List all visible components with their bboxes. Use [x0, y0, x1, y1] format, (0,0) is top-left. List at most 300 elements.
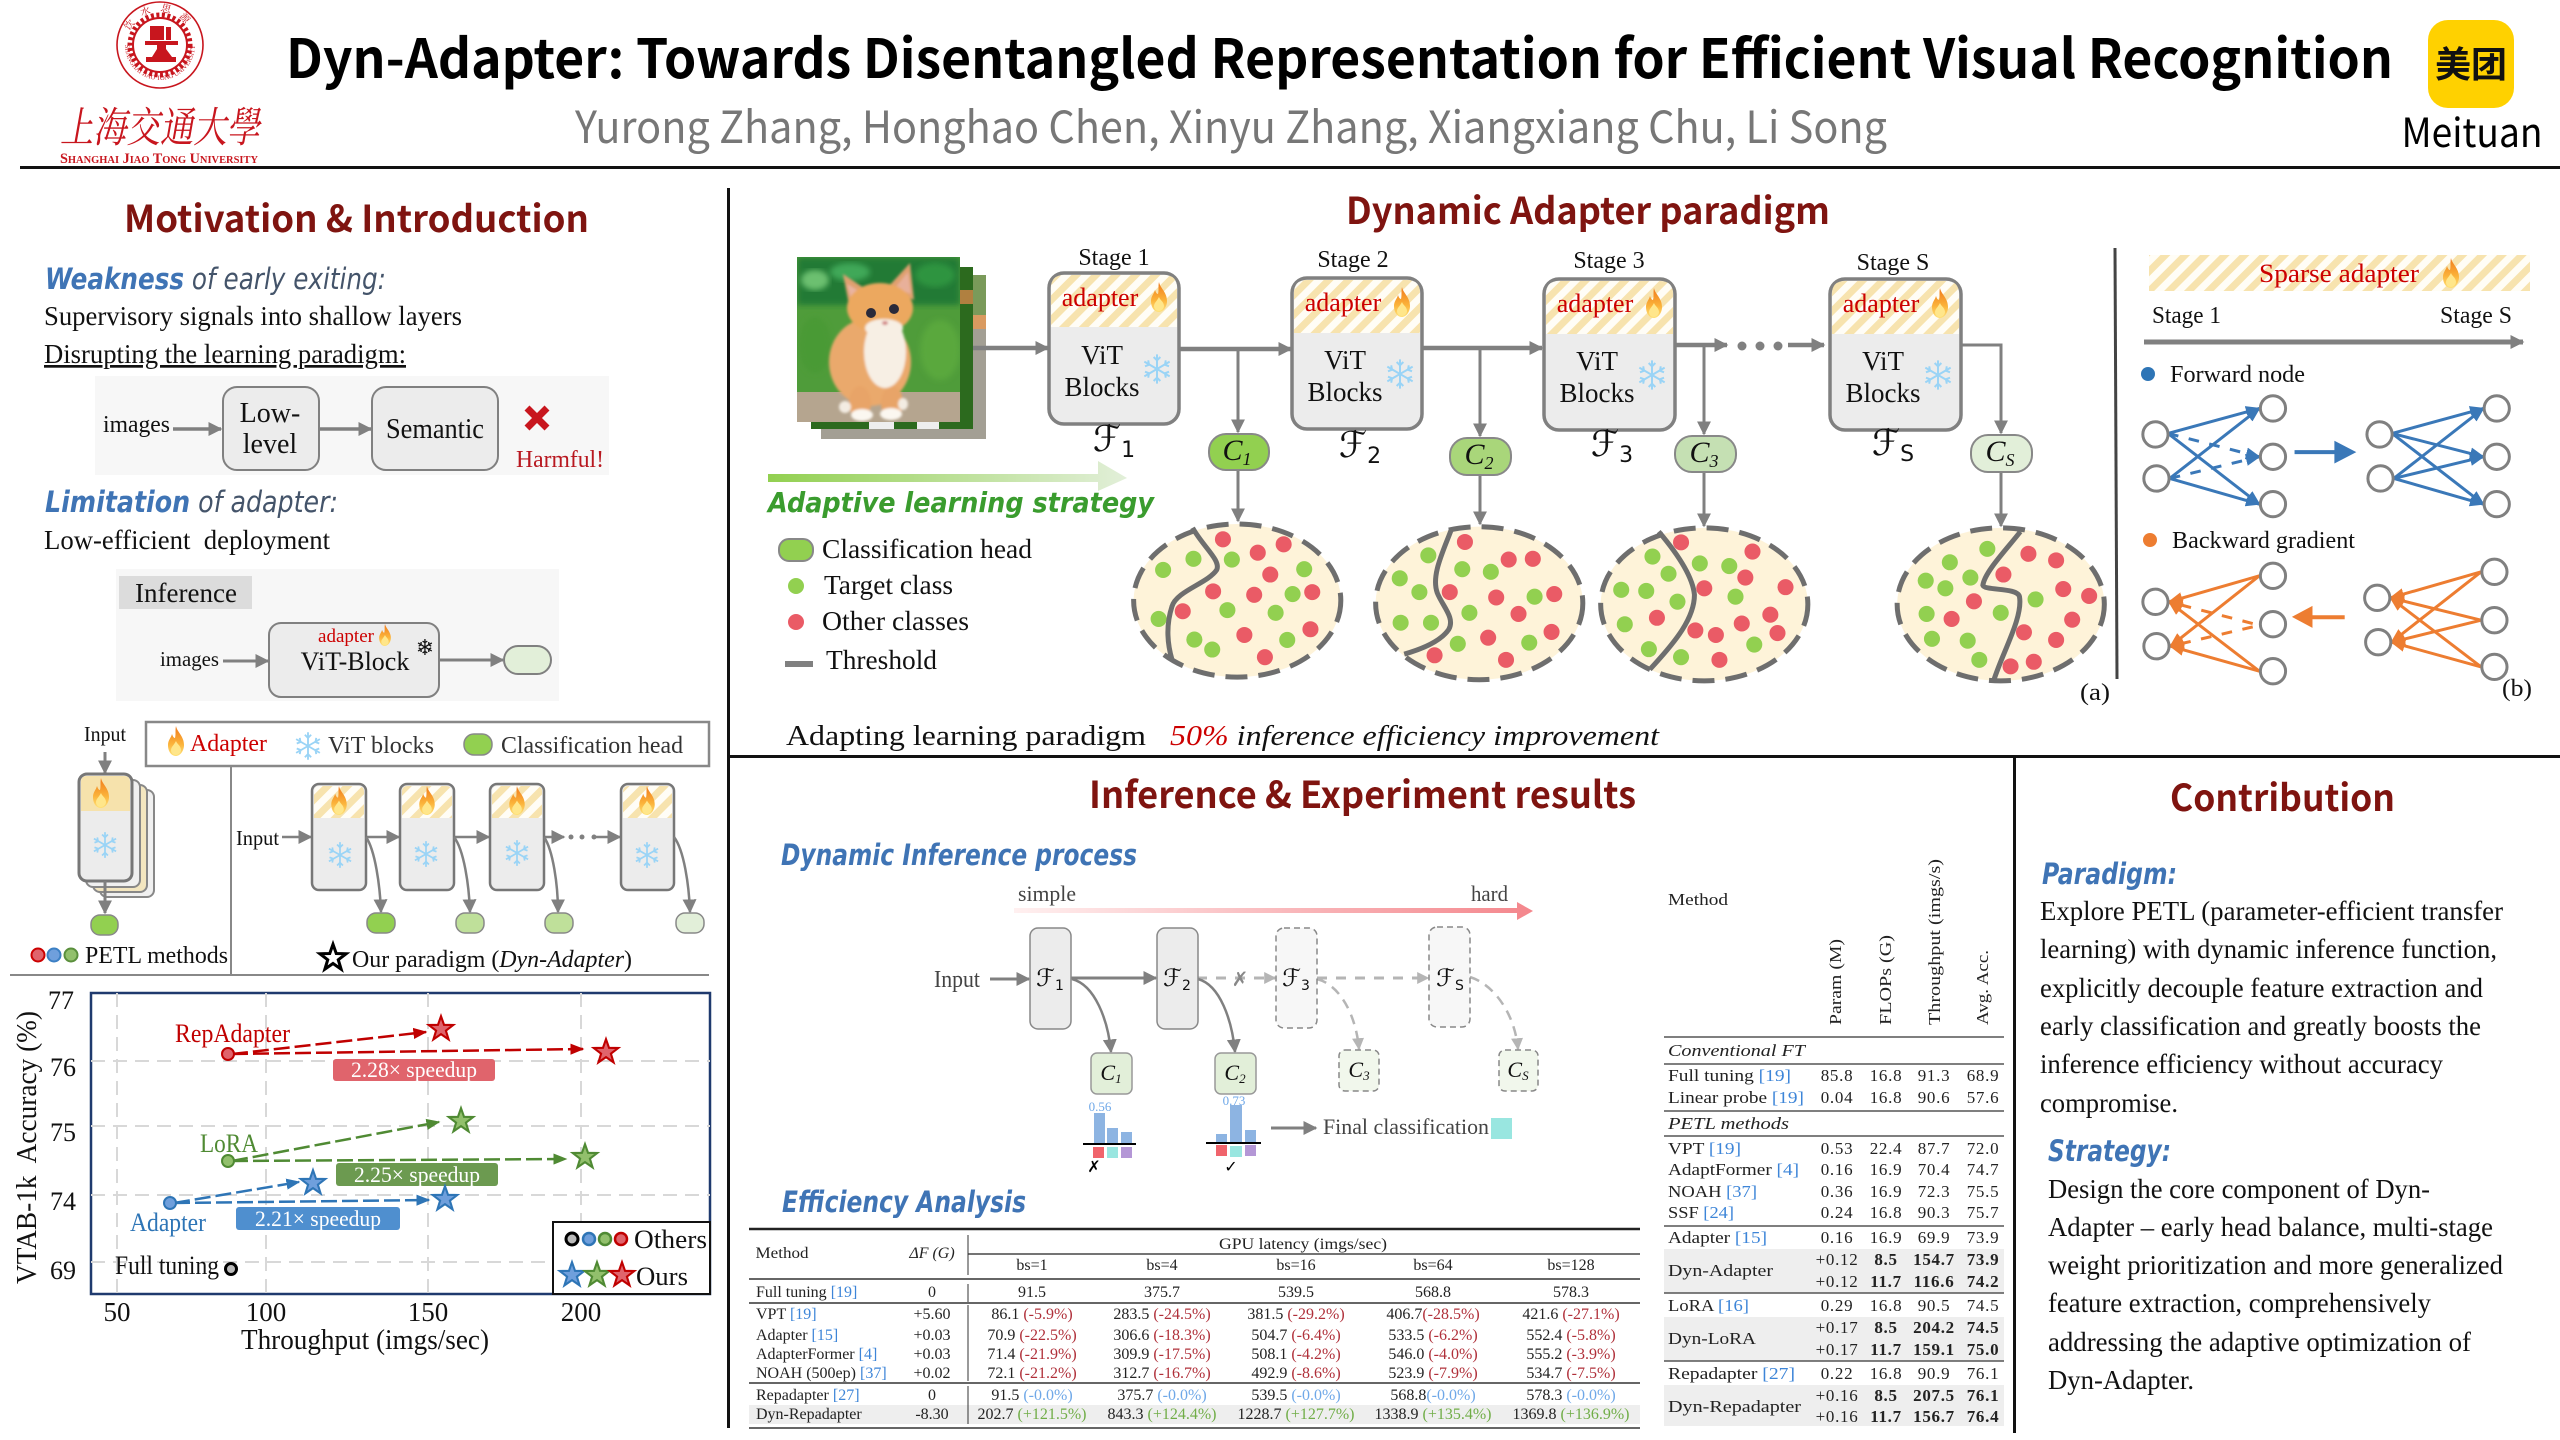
title: Dyn-Adapter: Towards Disentangled Representation for Efficient Visual Recognition: [286, 15, 2393, 94]
y axis title: VTAB-1k Accuracy (%): [12, 1011, 43, 1284]
table: method comparison: VPT [19]: [1668, 1139, 1741, 1158]
table: method comparison: 90.6: [1918, 1088, 1950, 1107]
table: GPU latency: +0.03: [913, 1327, 951, 1344]
table: GPU latency: bs=64: [1413, 1257, 1453, 1274]
series: Adapter: [130, 1170, 457, 1237]
table: method comparison: NOAH [37]: [1668, 1182, 1757, 1201]
nodes: [2143, 396, 2509, 684]
diagram: harmful early exit: [95, 376, 609, 475]
table: GPU latency: 283.5 (-24.5%): [1113, 1306, 1211, 1323]
table: method comparison: +0.17: [1816, 1340, 1858, 1359]
table: method comparison: 90.9: [1918, 1364, 1950, 1383]
table: method comparison: 0.29: [1821, 1296, 1853, 1315]
table: method comparison: 8.5: [1874, 1386, 1898, 1405]
table: method comparison: 16.9: [1870, 1182, 1902, 1201]
text: weakness of early exiting: Weakness of early exiting:: [45, 262, 386, 296]
table: method comparison: 16.9: [1870, 1228, 1902, 1247]
diagram: dynamic inference: ℱ: [1036, 964, 1055, 992]
diagram: harmful early exit: Semantic: [386, 414, 484, 445]
text: adapting learning paradigm: Adapting learning paradigm: [786, 720, 1146, 752]
table: method comparison: Adapter [15]: [1668, 1228, 1767, 1247]
table: GPU latency: +5.60: [913, 1306, 951, 1323]
series: RepAdapter: [175, 1016, 618, 1082]
legend: adaptive strategy: Threshold: [826, 645, 937, 675]
classification heads: 2: [1485, 453, 1494, 473]
diagram: dynamic inference: S: [1522, 1068, 1529, 1083]
table: method comparison: 74.5: [1967, 1296, 1999, 1315]
diagram: harmful early exit: images: [103, 412, 170, 438]
table: GPU latency: +0.03: [913, 1346, 951, 1363]
table: GPU latency: 86.1 (-5.9%): [991, 1306, 1073, 1323]
arrow: forward transition: [2295, 441, 2356, 463]
x axis labels: 100: [246, 1297, 286, 1327]
table: method comparison: 90.3: [1918, 1203, 1950, 1222]
text: paradigm body: early classification and greatly boosts the: [2040, 1011, 2481, 1041]
image: kitten: [797, 257, 986, 439]
table: method comparison: FLOPs (G): [1876, 935, 1895, 1025]
diagram: dynamic inference: hard: [1471, 881, 1508, 906]
logo: Meituan: [2402, 20, 2542, 159]
block: stage 3: ViT: [1576, 346, 1618, 376]
diagram: harmful early exit: Harmful!: [516, 447, 604, 473]
table: method comparison: 57.6: [1967, 1088, 1999, 1107]
legend: adaptive strategy: [779, 534, 1032, 675]
legend: [146, 722, 709, 766]
table: method comparison: 73.9: [1967, 1250, 1999, 1269]
series: RepAdapter: 2.28× speedup: [351, 1057, 477, 1082]
table: GPU latency: 534.7 (-7.5%): [1526, 1365, 1616, 1382]
table: method comparison: 154.7: [1913, 1250, 1955, 1269]
logo: Shanghai Jiao Tong University: [58, 1, 268, 167]
table: GPU latency: 568.8(-0.0%): [1390, 1387, 1476, 1404]
diagram: PETL methods stack: [32, 722, 228, 969]
x axis labels: 50: [104, 1297, 130, 1327]
table: method comparison: Dyn-Adapter: [1668, 1261, 1773, 1280]
table: GPU latency: 375.7: [1144, 1284, 1180, 1301]
text: low-efficient deployment: Low-efficient deployment: [44, 525, 330, 555]
x axis labels: [104, 1297, 601, 1327]
block: stage 3: Blocks: [1559, 378, 1635, 408]
block: stage 3: ℱ: [1591, 424, 1619, 465]
subheading: paradigm: Paradigm:: [2042, 857, 2177, 891]
legend: Classification head: [501, 733, 683, 759]
label: a: (a): [2080, 680, 2110, 706]
diagram: dynamic inference: simple: [1018, 881, 1076, 906]
stage axis: Stage S: [2440, 303, 2512, 329]
panel: inference and experiment results: [749, 765, 2004, 1428]
table: GPU latency: 1369.8 (+136.9%): [1512, 1406, 1630, 1423]
table: GPU latency: bs=4: [1146, 1257, 1178, 1274]
block: stage 3: Stage 3: [1573, 248, 1645, 274]
panel: contribution: [2040, 768, 2503, 1395]
text: strategy body: Design the core component of Dyn-: [2048, 1174, 2430, 1204]
table: method comparison: 76.1: [1967, 1364, 1999, 1383]
block: stage 1: [1049, 245, 1179, 463]
classification heads: 1: [1243, 449, 1252, 469]
block: stage S: [1830, 250, 1961, 467]
table: GPU latency: 1338.9 (+135.4%): [1374, 1406, 1492, 1423]
table: GPU latency: GPU latency (imgs/sec): [1219, 1236, 1387, 1253]
chart legend: Others: [634, 1225, 707, 1254]
table: GPU latency: 309.9 (-17.5%): [1113, 1346, 1211, 1363]
text: strategy body: addressing the adaptive optimization of: [2048, 1327, 2471, 1357]
table: method comparison: 22.4: [1870, 1139, 1902, 1158]
table: method comparison: 0.22: [1821, 1364, 1853, 1383]
block: stage 2: 2: [1367, 444, 1381, 469]
table: GPU latency: 508.1 (-4.2%): [1251, 1346, 1341, 1363]
diagram: dynamic inference: ✗: [1232, 967, 1248, 991]
panel: motivation and introduction: [44, 189, 609, 701]
diagram: dynamic inference: S: [1455, 978, 1464, 994]
table: method comparison: 11.7: [1870, 1272, 1902, 1291]
classification heads: 3: [1709, 451, 1719, 471]
table: method comparison: 85.8: [1821, 1066, 1853, 1085]
table: method comparison: 16.8: [1870, 1364, 1902, 1383]
text: supervisory signals: Supervisory signals into shallow layers: [44, 301, 462, 331]
block: stage 2: ViT: [1324, 345, 1366, 375]
table: method comparison: 116.6: [1914, 1272, 1954, 1291]
x axis labels: 150: [408, 1297, 448, 1327]
table: GPU latency: ΔF (G): [908, 1245, 955, 1262]
text: paradigm body: explicitly decouple feature extraction and: [2040, 973, 2483, 1003]
legend: adaptive strategy: Other classes: [822, 606, 969, 636]
block: stage 3: adapter: [1557, 289, 1634, 318]
table: GPU latency: 578.3 (-0.0%): [1526, 1387, 1616, 1404]
diagram: dynamic inference: ℱ: [1282, 964, 1301, 992]
series: RepAdapter: RepAdapter: [175, 1019, 290, 1048]
table: method comparison: 11.7: [1870, 1407, 1902, 1426]
table: GPU latency: 843.3 (+124.4%): [1107, 1406, 1217, 1423]
diagram: dynamic inference: 3: [1362, 1068, 1370, 1083]
diagram: dynamic inference: 1: [1115, 1071, 1122, 1086]
text: strategy body: weight prioritization and more generalized: [2048, 1250, 2503, 1280]
table: method comparison: 72.3: [1918, 1182, 1950, 1201]
table: method comparison: 73.9: [1967, 1228, 1999, 1247]
text: adaptive learning strategy: Adaptive learning strategy: [766, 486, 1156, 519]
table: method comparison: 0.53: [1821, 1139, 1853, 1158]
table: method comparison: +0.12: [1816, 1272, 1858, 1291]
table: method comparison: 91.3: [1918, 1066, 1950, 1085]
plot: stage S: [1897, 528, 2104, 681]
table: method comparison: 75.5: [1967, 1182, 1999, 1201]
table: method comparison: SSF [24]: [1668, 1203, 1734, 1222]
table: GPU latency: NOAH (500ep) [37]: [756, 1365, 887, 1382]
block: stage 2: Stage 2: [1317, 247, 1389, 273]
table: method comparison: 76.1: [1967, 1386, 1999, 1405]
table: method comparison: Conventional FT: [1668, 1041, 1807, 1060]
table: GPU latency: bs=16: [1276, 1257, 1316, 1274]
legend: adaptive strategy: Classification head: [822, 534, 1032, 564]
y axis labels: 74: [50, 1187, 76, 1216]
heading: dynamic adapter paradigm: Dynamic Adapter paradigm: [1346, 181, 1830, 235]
table: method comparison: LoRA [16]: [1668, 1296, 1749, 1315]
table: method comparison: 16.8: [1870, 1066, 1902, 1085]
table: GPU latency: bs=1: [1016, 1257, 1048, 1274]
table: method comparison: 11.7: [1870, 1340, 1902, 1359]
y axis labels: 77: [48, 986, 74, 1015]
diagram: PETL methods stack: PETL methods: [85, 943, 228, 969]
diagram: PETL methods stack: Input: [84, 722, 126, 746]
logo: Meituan: Meituan: [2402, 101, 2542, 159]
text: paradigm body: Explore PETL (parameter-efficient transfer: [2040, 896, 2503, 926]
table: GPU latency: Adapter [15]: [756, 1327, 838, 1344]
table: GPU latency: 578.3: [1553, 1284, 1589, 1301]
diagram: inference: ViT-Block: [301, 647, 409, 676]
legend: forward node: Forward node: [2170, 362, 2305, 388]
mini bars: C1 output: ✗: [1087, 1157, 1101, 1176]
divider between a and b: [2115, 248, 2117, 679]
block: stage S: ℱ: [1872, 423, 1900, 464]
table: GPU latency: bs=128: [1547, 1257, 1595, 1274]
mini bars: C1 output: 0.56: [1089, 1099, 1112, 1114]
table: method comparison: Dyn-LoRA: [1668, 1329, 1757, 1348]
logo: Shanghai Jiao Tong University: Shanghai Jiao Tong University: [60, 151, 258, 167]
y axis labels: 69: [50, 1256, 76, 1285]
table: GPU latency: 375.7 (-0.0%): [1117, 1387, 1207, 1404]
y axis labels: [48, 986, 76, 1285]
plot: stage 2: [1376, 527, 1583, 680]
network diagrams: [2143, 396, 2509, 684]
text: strategy body: Dyn-Adapter.: [2048, 1365, 2194, 1395]
table: GPU latency: Full tuning [19]: [756, 1284, 857, 1301]
classification heads: S: [2006, 450, 2015, 470]
authors: Yurong Zhang, Honghao Chen, Xinyu Zhang, Xiangxiang Chu, Li Song: [574, 92, 1887, 156]
table: GPU latency: VPT [19]: [756, 1306, 817, 1323]
table: method comparison: 16.8: [1870, 1088, 1902, 1107]
logo: Shanghai Jiao Tong University: 饮水思源: [124, 3, 191, 30]
table: GPU latency: 70.9 (-22.5%): [987, 1327, 1077, 1344]
text: limitation of adapter: Limitation of adapter:: [45, 485, 338, 519]
table: GPU latency: 492.9 (-8.6%): [1251, 1365, 1341, 1382]
classification heads: C: [1464, 438, 1485, 471]
table: GPU latency: 539.5: [1278, 1284, 1314, 1301]
arrows: main flow: [973, 345, 2001, 526]
legend: Adapter: [190, 731, 267, 757]
stage axis: [2144, 303, 2523, 342]
chart legend: Ours: [636, 1262, 688, 1291]
table: GPU latency: 568.8: [1415, 1284, 1451, 1301]
subheading: strategy: Strategy:: [2048, 1134, 2171, 1168]
panel: dynamic adapter paradigm: [766, 181, 2110, 752]
legend: adaptive strategy: Target class: [824, 570, 953, 600]
table: method comparison: 204.2: [1913, 1318, 1955, 1337]
label: b: (b): [2502, 676, 2532, 702]
classification heads: C: [1985, 435, 2006, 468]
table: method comparison: 159.1: [1913, 1340, 1955, 1359]
diagram: dynamic inference: 1: [1055, 978, 1064, 994]
block: stage S: S: [1900, 442, 1914, 467]
table: method comparison: 90.5: [1918, 1296, 1950, 1315]
table: GPU latency: 71.4 (-21.9%): [987, 1346, 1077, 1363]
sparse adapter bar: Sparse adapter: [2259, 259, 2419, 288]
table: method comparison: 16.9: [1870, 1160, 1902, 1179]
table: method comparison: 75.0: [1967, 1340, 1999, 1359]
y axis labels: 75: [50, 1118, 76, 1147]
table: GPU latency: 555.2 (-3.9%): [1526, 1346, 1616, 1363]
table: method comparison: 74.7: [1967, 1160, 1999, 1179]
table: method comparison: Param (M): [1826, 939, 1845, 1025]
table: method comparison: 156.7: [1913, 1407, 1955, 1426]
arrow: adaptive learning: [768, 461, 1127, 491]
table: GPU latency: 546.0 (-4.0%): [1388, 1346, 1478, 1363]
sparse adapter bar: [2149, 255, 2530, 291]
diagram: dynamic inference: 3: [1301, 978, 1310, 994]
mini bars: C1 output: [1083, 1099, 1136, 1176]
mini bars: C2 output: ✓: [1224, 1157, 1238, 1176]
diagram: inference: images: [160, 647, 219, 671]
chart legend: [553, 1222, 710, 1294]
table: method comparison: +0.16: [1816, 1386, 1858, 1405]
diagram: inference: ❄: [416, 636, 434, 661]
classification heads: C: [1689, 436, 1710, 469]
table: GPU latency: 552.4 (-5.8%): [1526, 1327, 1616, 1344]
arrow: backward transition: [2292, 606, 2345, 628]
block: stage 1: ℱ: [1093, 419, 1121, 460]
diagram: harmful early exit: level: [243, 429, 297, 460]
block: stage 1: Stage 1: [1078, 245, 1150, 271]
diagram: dynamic inference: C: [1100, 1060, 1115, 1085]
table: GPU latency: [749, 1229, 1640, 1428]
table: method comparison: +0.17: [1816, 1318, 1858, 1337]
series: Full tuning: Full tuning: [115, 1251, 219, 1280]
plot: stage 3: [1601, 528, 1808, 681]
table: GPU latency: 381.5 (-29.2%): [1247, 1306, 1345, 1323]
text: disrupting paradigm: Disrupting the learning paradigm:: [44, 339, 406, 369]
table: GPU latency: 0: [928, 1284, 936, 1301]
table: method comparison: Method: [1668, 890, 1729, 909]
table: GPU latency: 312.7 (-16.7%): [1113, 1365, 1211, 1382]
table: GPU latency: AdapterFormer [4]: [756, 1346, 877, 1363]
table: GPU latency: -8.30: [915, 1406, 949, 1423]
table: GPU latency: 533.5 (-6.2%): [1388, 1327, 1478, 1344]
table: GPU latency: 539.5 (-0.0%): [1251, 1387, 1341, 1404]
table: method comparison: Linear probe [19]: [1668, 1088, 1804, 1107]
table: method comparison: 0.04: [1821, 1088, 1853, 1107]
diagram: harmful early exit: Low-: [240, 398, 300, 429]
table: GPU latency: +0.02: [913, 1365, 951, 1382]
legend: ViT blocks: [328, 733, 434, 759]
diagram: dynamic inference: Final classification: [1323, 1114, 1489, 1139]
logo: Shanghai Jiao Tong University: SHANGHAI JIAO TONG UNIVERSITY: [125, 45, 195, 80]
text: strategy body: Adapter – early head balance, multi-stage: [2048, 1212, 2493, 1242]
decision boundary plots: [1134, 524, 2104, 681]
table: GPU latency: 504.7 (-6.4%): [1251, 1327, 1341, 1344]
stage axis: Stage 1: [2152, 303, 2221, 329]
text: strategy body: feature extraction, comprehensively: [2048, 1288, 2431, 1318]
text: 50% inference efficiency improvement: 50% inference efficiency improvement: [1170, 720, 1660, 752]
x axis labels: 200: [561, 1297, 601, 1327]
classification heads: [1209, 434, 2032, 475]
chart: accuracy vs throughput: [12, 986, 710, 1356]
block: stage 1: 1: [1121, 438, 1135, 463]
block: stage 1: ViT: [1081, 340, 1123, 370]
table: method comparison: Repadapter [27]: [1668, 1364, 1795, 1383]
panel: PETL methods vs our paradigm: [10, 722, 709, 976]
table: method comparison: Full tuning [19]: [1668, 1066, 1791, 1085]
network: backward: [2169, 572, 2481, 671]
block: stage S: adapter: [1843, 289, 1920, 318]
table: method comparison: 76.4: [1967, 1407, 1999, 1426]
diagram: our paradigm: [236, 784, 704, 973]
block: stage 2: adapter: [1305, 288, 1382, 317]
diagram: dynamic inference: C: [1348, 1057, 1363, 1082]
table: method comparison: 0.36: [1821, 1182, 1853, 1201]
block: stage 2: ℱ: [1339, 425, 1367, 466]
series: LoRA: 2.25× speedup: [354, 1162, 480, 1187]
mini bars: C2 output: [1206, 1093, 1261, 1176]
table: method comparison: 16.8: [1870, 1296, 1902, 1315]
series: Adapter: 2.21× speedup: [255, 1206, 381, 1231]
block: stage S: ViT: [1862, 346, 1904, 376]
series: Adapter: Adapter: [130, 1208, 206, 1237]
table: GPU latency: Dyn-Repadapter: [756, 1406, 862, 1423]
table: GPU latency: 421.6 (-27.1%): [1522, 1306, 1620, 1323]
table: GPU latency: 202.7 (+121.5%): [977, 1406, 1087, 1423]
table: method comparison: AdaptFormer [4]: [1668, 1160, 1799, 1179]
logo: Shanghai Jiao Tong University: 上海交通大學: [58, 94, 268, 155]
mini bars: C2 output: 0.73: [1223, 1093, 1245, 1108]
y axis labels: 76: [50, 1053, 76, 1082]
series: LoRA: [200, 1108, 597, 1187]
block: stage S: Stage S: [1857, 250, 1929, 276]
subheading: efficiency analysis: Efficiency Analysis: [782, 1185, 1026, 1219]
diagram: dynamic inference: C: [1224, 1060, 1239, 1085]
table: method comparison: 74.5: [1967, 1318, 1999, 1337]
table: GPU latency: Method: [756, 1245, 808, 1262]
table: method comparison: +0.12: [1816, 1250, 1858, 1269]
table: method comparison: Throughput (imgs/s): [1925, 859, 1944, 1025]
diagram: inference: adapter: [318, 626, 375, 647]
heading: motivation: Motivation & Introduction: [124, 189, 589, 243]
block: stage S: Blocks: [1845, 378, 1921, 408]
table: method comparison: Avg. Acc.: [1973, 950, 1992, 1025]
x axis title: Throughput (imgs/sec): [241, 1325, 489, 1356]
block: stage 3: 3: [1619, 443, 1633, 468]
block: stage 2: [1292, 247, 1422, 469]
table: GPU latency: 1228.7 (+127.7%): [1237, 1406, 1355, 1423]
table: GPU latency: 91.5 (-0.0%): [991, 1387, 1073, 1404]
table: GPU latency: Repadapter [27]: [756, 1387, 860, 1404]
text: strategy body: [2048, 1174, 2503, 1395]
table: method comparison: 207.5: [1913, 1386, 1955, 1405]
table: method comparison: 72.0: [1967, 1139, 1999, 1158]
header: [20, 1, 2560, 169]
table: method comparison: 0.24: [1821, 1203, 1853, 1222]
diagram: inference: Inference: [135, 578, 237, 608]
block: stage 3: [1544, 248, 1675, 468]
classification heads: C: [1222, 434, 1243, 467]
series: LoRA: LoRA: [200, 1129, 258, 1158]
legend: backward gradient: Backward gradient: [2172, 528, 2355, 554]
table: method comparison: 70.4: [1918, 1160, 1950, 1179]
block: stage 1: adapter: [1062, 283, 1139, 312]
text: paradigm body: [2040, 896, 2503, 1118]
diagram: our paradigm: Our paradigm (Dyn-Adapter): [352, 947, 632, 973]
table: method comparison: 68.9: [1967, 1066, 1999, 1085]
diagram: dynamic inference: 2: [1182, 978, 1191, 994]
diagram: dynamic inference: C: [1507, 1057, 1522, 1082]
table: method comparison: Dyn-Repadapter: [1668, 1397, 1801, 1416]
panel: sparse adapter: [2141, 255, 2532, 702]
table: method comparison: [1664, 859, 2004, 1426]
text: paradigm body: inference efficiency without accuracy: [2040, 1049, 2443, 1079]
table: method comparison: 0.16: [1821, 1228, 1853, 1247]
table: method comparison: 69.9: [1918, 1228, 1950, 1247]
diagram: dynamic inference: [934, 881, 1538, 1176]
table: method comparison: 16.8: [1870, 1203, 1902, 1222]
heading: inference and experiment results: Inference & Experiment results: [1089, 765, 1636, 819]
table: method comparison: 8.5: [1874, 1318, 1898, 1337]
